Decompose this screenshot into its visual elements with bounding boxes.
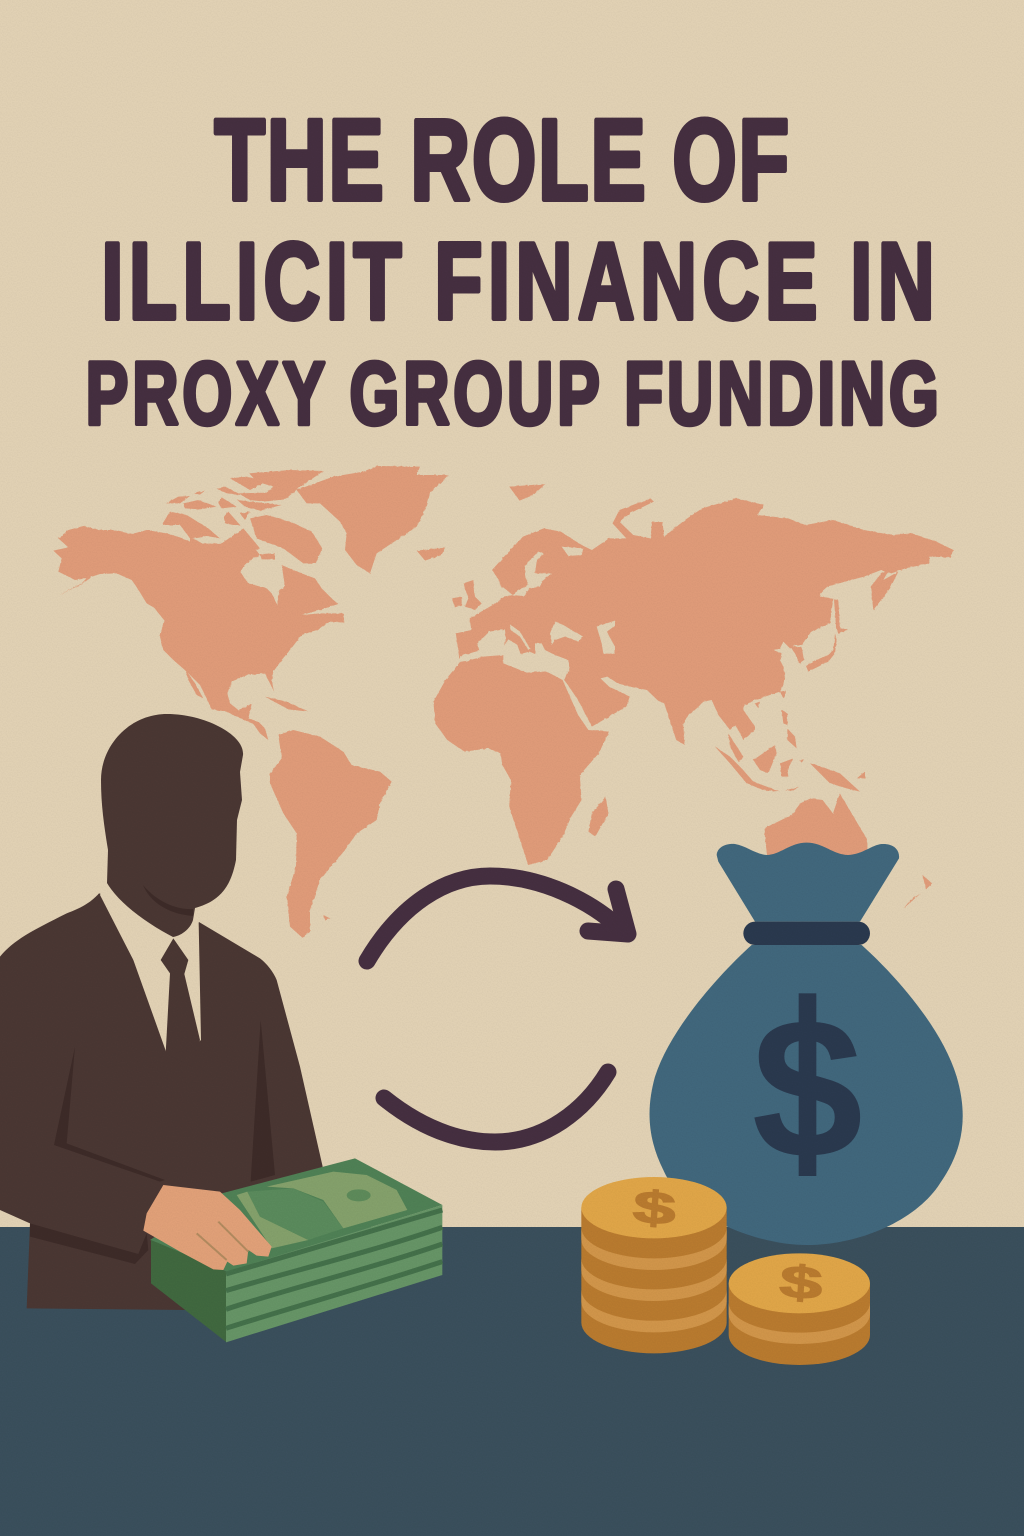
circular arrows — [367, 876, 628, 1142]
dollar sign on bag: $ — [752, 977, 863, 1200]
bag tie — [743, 922, 870, 945]
map: Eurasia, Africa and islands — [433, 484, 953, 908]
bag body — [650, 945, 963, 1245]
money bag — [650, 843, 963, 1245]
map: North and South America — [53, 526, 392, 937]
arrow: bottom arc — [384, 1072, 608, 1142]
map: Europe and inland seas — [452, 547, 615, 673]
coin stacks — [581, 1177, 870, 1365]
chin shadow — [143, 885, 193, 916]
map: East Asia and Southeast Asia — [680, 560, 898, 792]
title: THE ROLE OF — [215, 96, 789, 225]
bag neck — [717, 843, 899, 922]
person — [0, 714, 323, 1310]
small coin stack: $ — [778, 1256, 824, 1310]
bill artwork — [267, 1172, 407, 1228]
arrow: top arc with arrowhead — [367, 876, 628, 961]
cash front edge — [226, 1205, 442, 1342]
world map — [53, 466, 953, 937]
shirt — [100, 880, 227, 1053]
cash left side — [151, 1240, 227, 1342]
large coin stack — [581, 1177, 727, 1353]
map: Britain and Ireland — [452, 580, 482, 610]
hand — [143, 1185, 272, 1270]
jacket — [0, 880, 323, 1310]
table — [0, 1227, 1024, 1536]
tie — [161, 938, 200, 1067]
stack of cash — [150, 1158, 442, 1342]
cash top face — [150, 1158, 442, 1272]
small coin stack — [729, 1253, 870, 1365]
head silhouette — [101, 714, 243, 937]
map: Baltic, Mediterranean, Black and Caspian seas — [460, 547, 615, 673]
map: Arctic Canada islands — [163, 470, 323, 563]
jacket folds — [30, 1020, 275, 1264]
title: ILLICIT FINANCE IN — [102, 221, 935, 343]
large coin stack: $ — [631, 1182, 677, 1235]
title: PROXY GROUP FUNDING — [86, 345, 939, 444]
title — [86, 96, 939, 444]
map: Greenland and Iceland — [297, 466, 448, 573]
